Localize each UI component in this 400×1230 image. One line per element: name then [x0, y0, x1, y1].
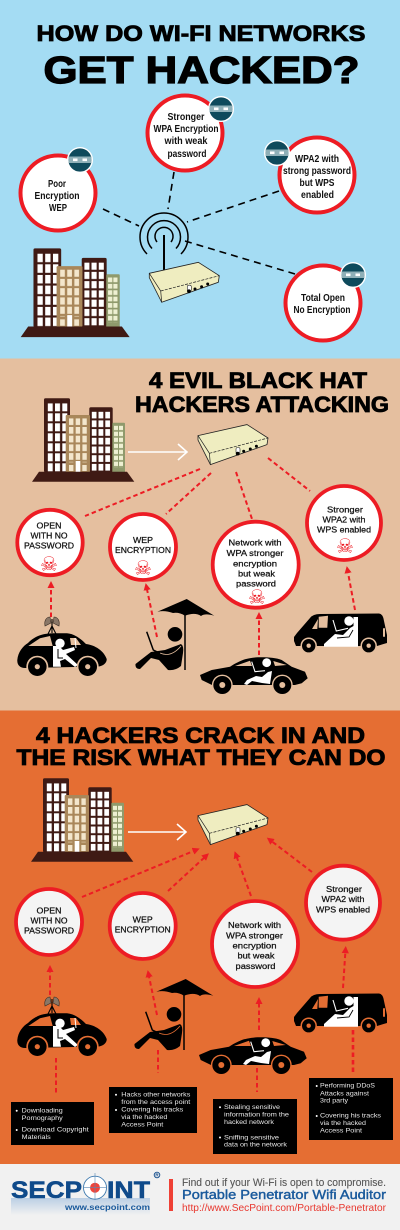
heading: THE RISK WHAT THEY CAN DO [16, 745, 386, 770]
bubble: WEP encryption: WEP [133, 535, 153, 545]
risk box: open network: Pornography [22, 1115, 64, 1122]
hacker: van [294, 994, 387, 1034]
bubble: WPA stronger encryption: WPA stronger [226, 548, 284, 558]
logo: SecPoint: INT [107, 1177, 150, 1204]
risk box: WPA2 WPS network: Access Point [320, 1128, 362, 1135]
risk box: WPA2 WPS network: Performing DDoS [320, 1083, 375, 1090]
heading [135, 368, 389, 417]
logo: SecPoint: SECP [11, 1177, 82, 1204]
bubble: poor encryption WEP: Encryption [34, 190, 80, 202]
divider bar [169, 1179, 173, 1211]
risk box: open network: Download Copyright [22, 1127, 89, 1134]
hacker: car with antenna [17, 997, 107, 1058]
bubble: WPA stronger encryption: password [236, 579, 276, 589]
bubble: WPA2 with WPS: WPA2 with [295, 153, 339, 165]
risk box: WEP network: Covering his tracks [121, 1107, 183, 1114]
risk box: WPA2 WPS network [309, 1078, 393, 1140]
bubble: WEP encryption [110, 514, 176, 580]
hacker: person under umbrella [134, 979, 213, 1050]
heading: 4 EVIL BLACK HAT [149, 368, 368, 393]
risk box: WEP network: via the hacked [121, 1114, 168, 1121]
bubble: stronger WPA2 with WPS: Stronger [326, 884, 362, 894]
bubble: open with no password: OPEN [36, 905, 62, 915]
heading: HACKERS ATTACKING [135, 392, 389, 417]
bubble: WPA stronger encryption: password [236, 961, 276, 971]
bubble: poor encryption WEP [20, 148, 96, 230]
risk box: open network [11, 1102, 94, 1145]
bubble: open with no password: WITH NO [30, 531, 68, 541]
red dashed arrows into router [82, 840, 312, 897]
bubble: open with no password: PASSWORD [24, 926, 74, 936]
bubble: open with no password [16, 889, 82, 955]
title [36, 21, 366, 92]
icon: city buildings [32, 398, 134, 482]
icon: mask [68, 148, 92, 172]
bubble: WEP encryption: WEP [133, 915, 153, 925]
icon: skull: ☠ [248, 585, 266, 609]
hacker: person under umbrella [135, 599, 214, 670]
panel: 4 evil black hat hackers attacking [0, 358, 400, 710]
bubble: WPA stronger encryption: but weak [238, 951, 275, 961]
bubble: stronger WPA2 with WPS: WPS enabled [316, 904, 370, 914]
bubble: total open [286, 263, 365, 340]
promo text: http://www.SecPoint.com/Portable-Penetrator [182, 1202, 386, 1214]
icon: mask [265, 141, 289, 165]
bubble: open with no password [17, 510, 83, 576]
hacker: sedan [200, 657, 308, 695]
bubble: stronger WPA2 with WPS [307, 486, 381, 560]
arrow: buildings to router [128, 824, 186, 840]
risk box: open network: Downloading [22, 1108, 63, 1114]
icon: city buildings [21, 248, 130, 337]
risk box: WEP network: Access Point [121, 1122, 164, 1129]
red arrows from hackers to bubbles [51, 570, 355, 655]
bubble: WPA stronger encryption: encryption [232, 941, 277, 951]
risk box: WPA2 WPS network: Covering his tracks [320, 1113, 381, 1120]
bubble: stronger WPA encryption: Stronger [168, 111, 204, 123]
risk box: WPA network: hacked network [224, 1119, 275, 1126]
bubble: WEP encryption [110, 893, 176, 959]
bubble: WPA2 with WPS: but WPS [300, 177, 334, 189]
bubble: open with no password: WITH NO [30, 915, 68, 925]
risk box: WEP network: Hacks other networks [121, 1091, 190, 1098]
icon: skull: ☠ [336, 534, 354, 558]
panel: how networks get hacked [0, 0, 400, 358]
bubble: stronger WPA encryption [148, 96, 233, 170]
icon: router [149, 262, 219, 302]
bubble: stronger WPA2 with WPS: WPA2 with [322, 894, 365, 904]
risk box: WPA2 WPS network: 3rd party [320, 1098, 349, 1105]
heading [16, 723, 386, 770]
icon: mask [209, 97, 233, 121]
heading: 4 HACKERS CRACK IN AND [36, 723, 365, 748]
arrow: buildings to router [128, 444, 187, 460]
bubble: stronger WPA2 with WPS [306, 866, 380, 940]
bubble: stronger WPA encryption: password [168, 148, 206, 160]
bubble: WPA stronger encryption: Network with [228, 920, 281, 930]
bubble: WPA stronger encryption: WPA stronger [226, 930, 283, 940]
title: HOW DO WI-FI NETWORKS [36, 21, 366, 46]
bubble: WPA stronger encryption: Network with [228, 538, 282, 548]
risk box: WPA network: Stealing sensitive [224, 1104, 281, 1111]
bubble: total open: No Encryption [294, 304, 350, 316]
risk box: WPA network: data on the network [224, 1142, 288, 1149]
bubble: open with no password: PASSWORD [24, 541, 74, 551]
risk box: WPA network: information from the [224, 1112, 290, 1119]
hacker: car with antenna [17, 617, 107, 678]
bubble: open with no password: OPEN [36, 521, 62, 531]
risk box: WPA2 WPS network: Attacks against [320, 1090, 369, 1097]
bubble: poor encryption WEP: WEP [49, 202, 67, 214]
panel: hackers crack in and the risk [0, 710, 400, 1164]
bubble: WEP encryption: ENCRYPTION [115, 545, 171, 555]
risk box: open network: Materials [22, 1134, 51, 1141]
promo text: Portable Penetrator Wifi Auditor [182, 1187, 387, 1202]
title: GET HACKED? [44, 50, 360, 92]
icon: mask [341, 263, 365, 287]
risk box: WEP network: from the access point [121, 1099, 191, 1106]
bubble: stronger WPA2 with WPS: WPS enabled [317, 525, 371, 535]
icon: router [198, 805, 268, 845]
icon: router [198, 425, 268, 465]
bubble: stronger WPA2 with WPS: WPA2 with [322, 515, 366, 525]
icon: city buildings [31, 778, 133, 862]
risk box: WPA network [213, 1099, 297, 1154]
hacker: sedan [199, 1037, 307, 1075]
promo text: Find out if your Wi-Fi is open to compromise. [182, 1177, 386, 1189]
risk box: WPA2 WPS network: via the hacked [320, 1120, 367, 1127]
bubble: poor encryption WEP: Poor [48, 178, 66, 190]
bubble: WPA stronger encryption [212, 901, 298, 987]
bubble: WPA2 with WPS: strong password [283, 165, 351, 177]
logo: SecPoint: www.secpoint.com [64, 1202, 150, 1212]
bubble: WPA stronger encryption: encryption [233, 558, 277, 568]
bubble: WPA2 with WPS [265, 138, 354, 212]
bubble: WEP encryption: ENCRYPTION [115, 925, 171, 935]
bubble: total open: Total Open [301, 292, 345, 304]
red arrows from hackers to bubbles [50, 950, 346, 1030]
bubble: WPA stronger encryption [213, 522, 299, 609]
red dashed links to router [85, 458, 310, 519]
risk box: WPA network: Sniffing sensitive [224, 1134, 280, 1141]
panel: footer [0, 1164, 400, 1230]
risk box: WEP network [109, 1087, 197, 1133]
logo: SecPoint [11, 1172, 160, 1215]
dashed connection lines [103, 172, 295, 274]
icon: skull: ☠ [134, 556, 152, 580]
bubble: WPA2 with WPS: enabled [301, 189, 334, 201]
promo text [182, 1177, 387, 1214]
bubble: WPA stronger encryption: but weak [238, 568, 276, 578]
hacker: van [294, 614, 387, 654]
bubble: stronger WPA2 with WPS: Stronger [327, 505, 363, 515]
bubble: stronger WPA encryption: with weak [164, 135, 208, 147]
logo: SecPoint: R [155, 1173, 159, 1178]
icon: wireless signal and antenna [140, 213, 188, 270]
icon: skull: ☠ [40, 552, 58, 576]
bubble: stronger WPA encryption: WPA Encryption [154, 123, 218, 135]
red dashed links to risk boxes [56, 1030, 353, 1095]
